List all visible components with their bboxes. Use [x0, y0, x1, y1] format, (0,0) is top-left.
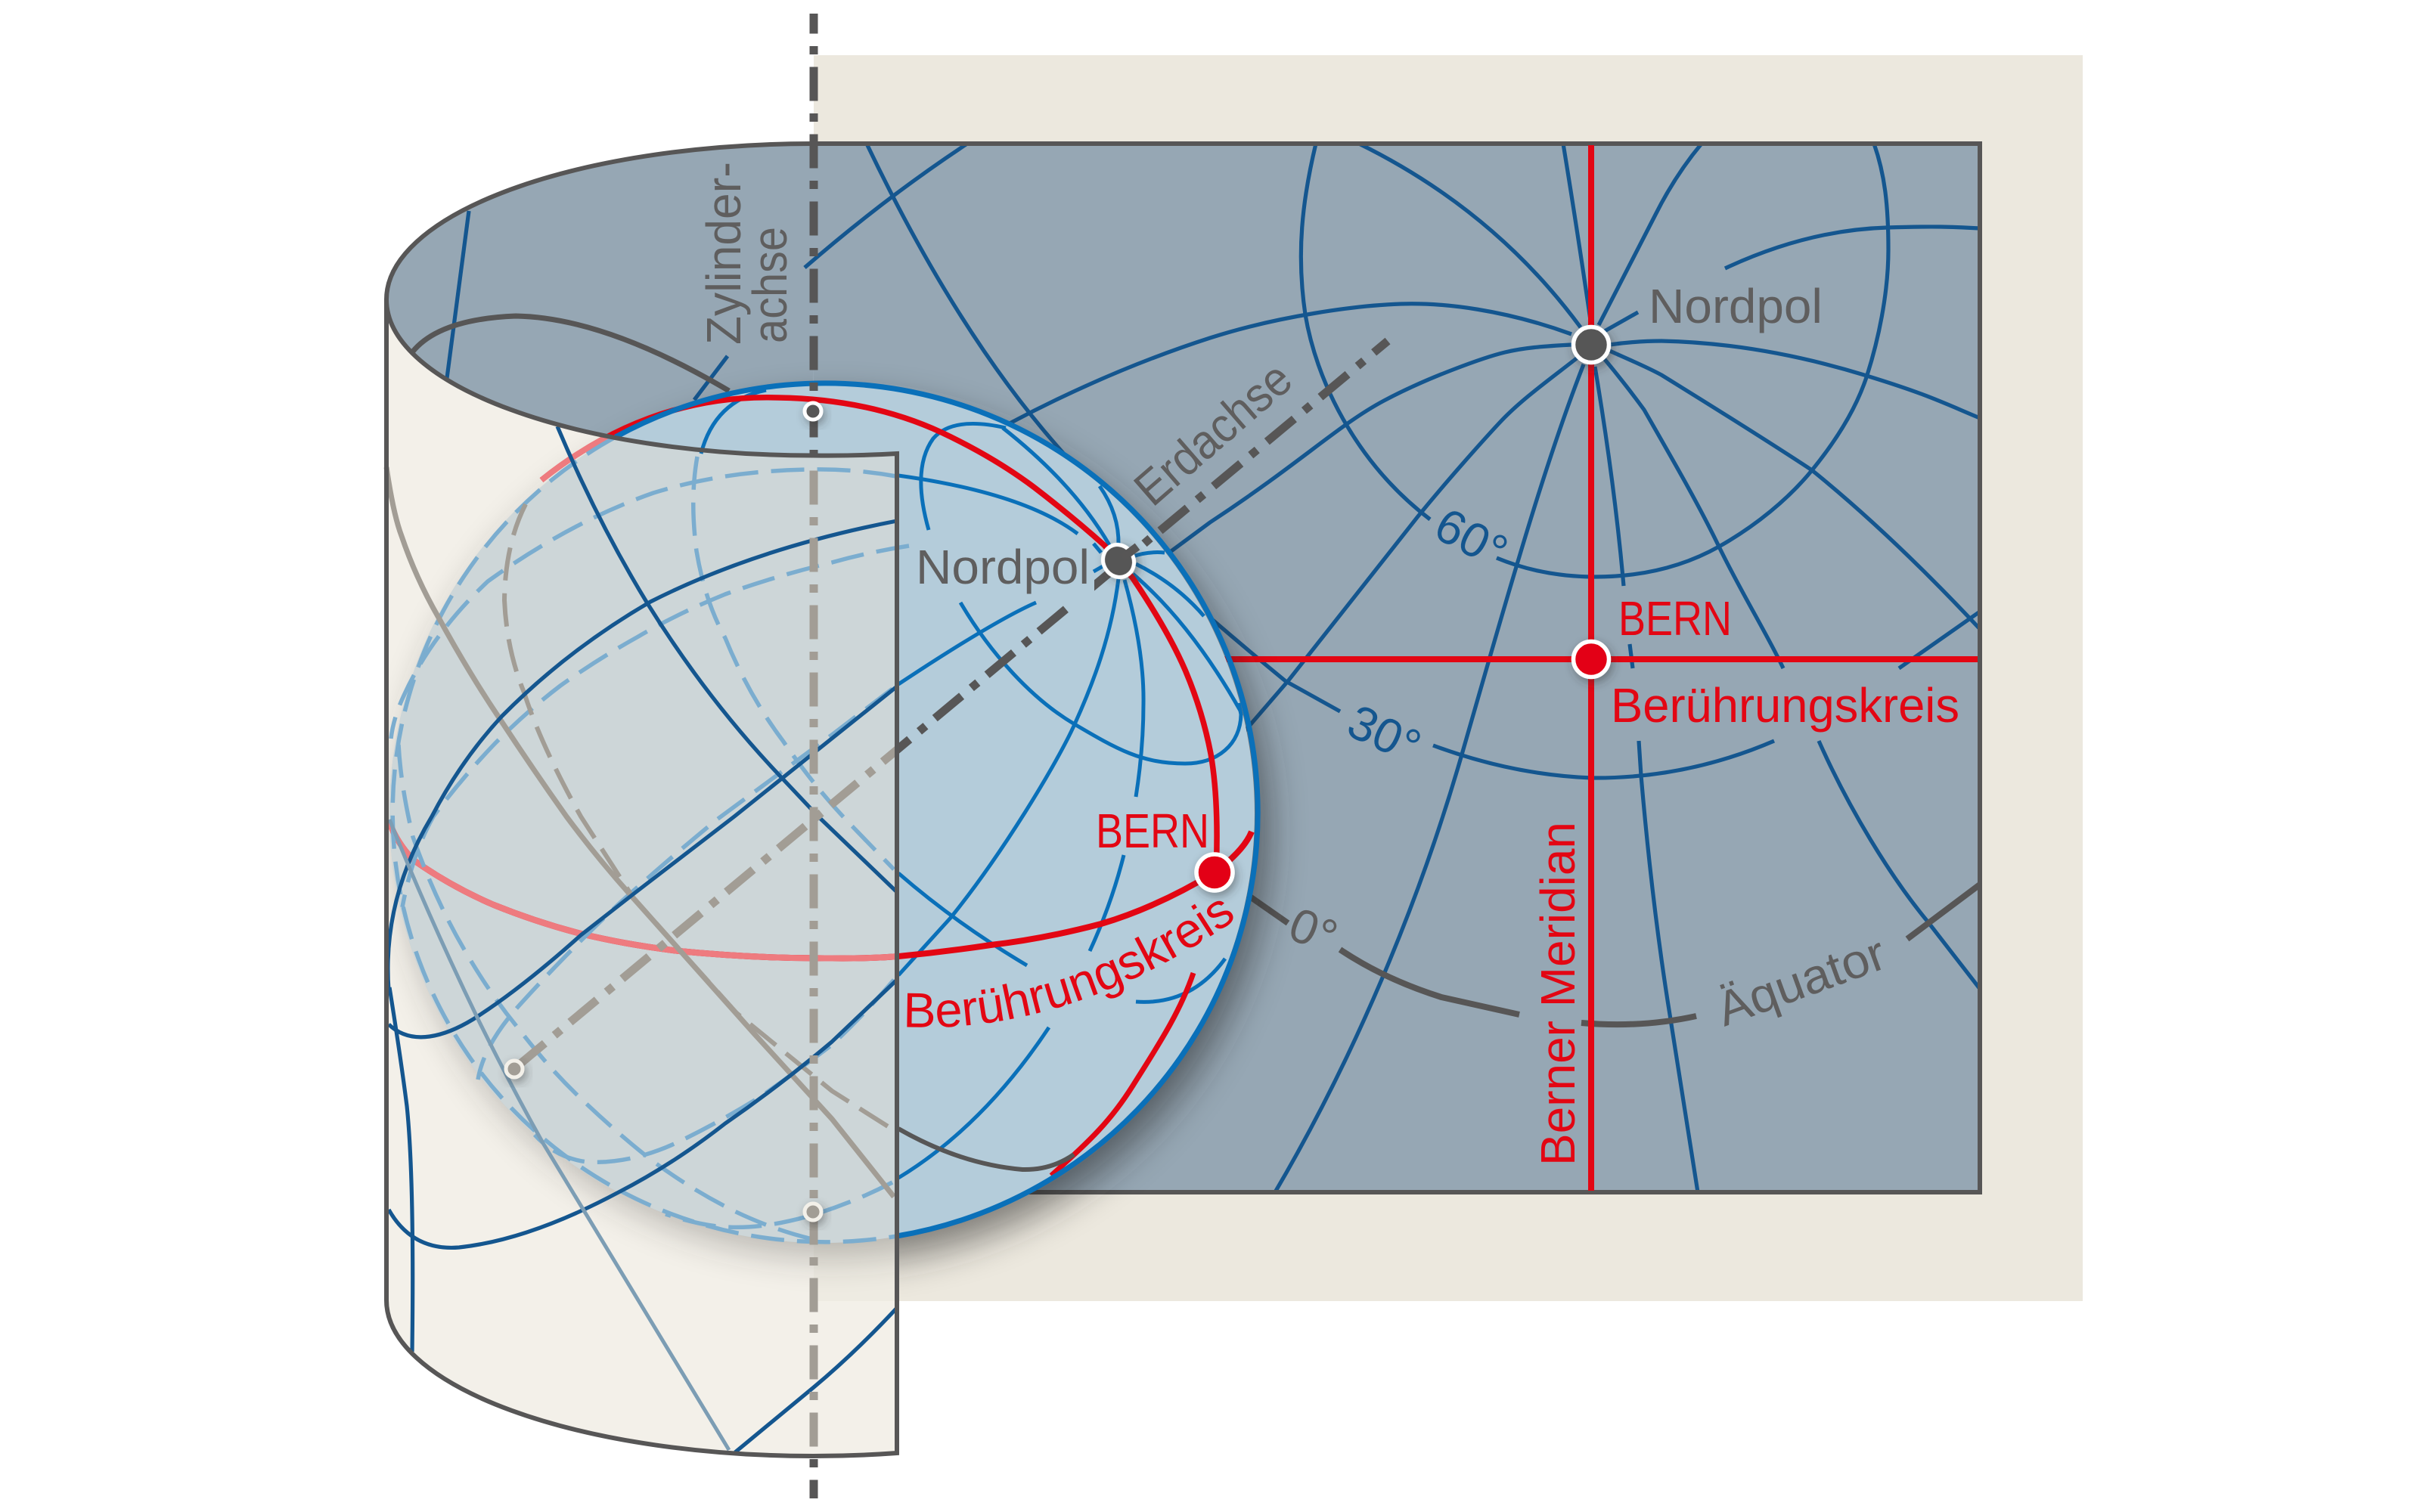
- icon: Bern dot on globe: [1196, 854, 1233, 891]
- label: Berührungskreis on globe: Berührungskreis: [907, 901, 1233, 1027]
- label: Zylinderachse: [697, 162, 797, 345]
- label: 30 degrees: 30°: [1340, 694, 1429, 774]
- tan sheet seen through cylinder: [814, 1232, 897, 1301]
- heading: Nordpol on map: Nordpol: [1649, 279, 1823, 333]
- icon: Nordpol dot on map: [1573, 327, 1609, 363]
- heading: Berner Meridian: Berner Meridian: [1531, 822, 1585, 1166]
- globe shadow on cylinder: [389, 452, 895, 1276]
- icon: Bern dot on map: [1573, 641, 1609, 677]
- icon: north pole on globe: [1097, 539, 1140, 583]
- label: BERN on globe: BERN: [1096, 804, 1209, 858]
- map lines on cylinder front: [388, 426, 897, 1452]
- curved baseline for Berührungskreis: [903, 911, 1248, 1027]
- panel: cylinder front: [386, 299, 897, 1456]
- cylinder axis: [809, 0, 818, 1504]
- earth axis: [514, 341, 1388, 1069]
- label: Zylinderachse: achse: [743, 227, 797, 343]
- heading: Berührungskreis on map: Berührungskreis: [1611, 678, 1959, 733]
- background sheet: [814, 55, 2083, 1301]
- globe: [389, 383, 1258, 1243]
- label: Zylinderachse: Zylinder-: [697, 162, 751, 345]
- icon: earth axis south point: [506, 1061, 523, 1077]
- cylinder outline: [386, 144, 897, 1456]
- heading: BERN on map: BERN: [1618, 591, 1732, 646]
- label: Erdachse: Erdachse: [1124, 351, 1302, 516]
- globe hidden lines seen through cylinder: [391, 437, 909, 1242]
- globe shadow on map: [674, 377, 1293, 1284]
- label: Nordpol on globe: Nordpol: [916, 540, 1090, 594]
- label: Äquator: Äquator: [1709, 925, 1893, 1036]
- icon: cylinder axis top point: [805, 403, 821, 420]
- label: 0 degrees: 0°: [1282, 897, 1345, 965]
- icon: cylinder axis bottom point: [805, 1204, 821, 1220]
- label: 60 degrees: 60°: [1426, 497, 1516, 579]
- equator on cylinder front: [386, 467, 894, 1197]
- panel: unrolled map: [386, 144, 1980, 1192]
